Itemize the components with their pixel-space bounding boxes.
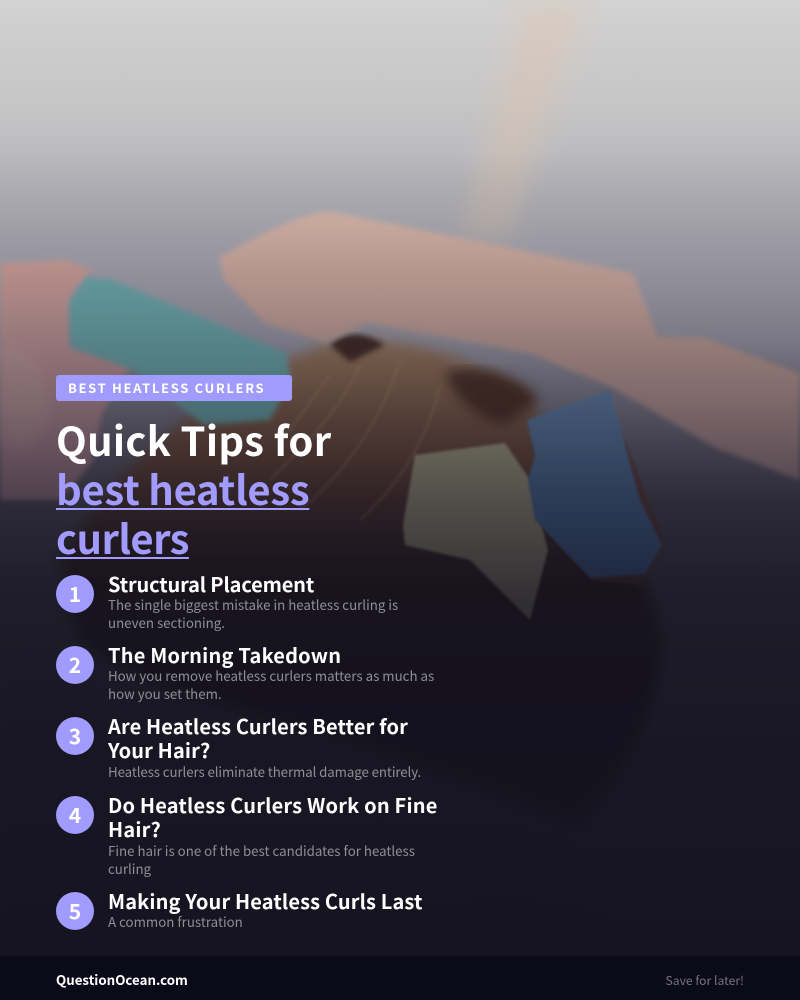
tip 4 text: Fine hair is one of the best candidates for heatless (108, 841, 415, 860)
number 5: 5 (69, 896, 81, 926)
tip 1 text: The single biggest mistake in heatless curling is (108, 595, 398, 614)
tip 5 (56, 886, 423, 931)
tip 2 (56, 640, 434, 703)
title (56, 410, 332, 566)
tip 2 text: How you remove heatless curlers matters as much as (108, 666, 434, 685)
category tag (56, 375, 292, 401)
number 1: 1 (69, 579, 81, 609)
number 5 (56, 892, 94, 930)
tip 5 text: A common frustration (108, 912, 243, 931)
tip 3 heading: Your Hair? (108, 735, 210, 764)
tip 1 text (108, 595, 398, 632)
tip 2 text: how you set them. (108, 684, 222, 703)
tip 3 heading: Are Heatless Curlers Better for (108, 711, 408, 740)
number 2: 2 (69, 650, 81, 680)
number 3: 3 (69, 721, 81, 751)
title: curlers (56, 508, 189, 566)
site name: QuestionOcean.com (56, 970, 188, 989)
tip 1 (56, 569, 398, 632)
tip 4 (56, 790, 438, 878)
category tag: BEST HEATLESS CURLERS (68, 378, 265, 397)
tip 4 text (108, 841, 415, 878)
number 2 (56, 646, 94, 684)
footer bar (0, 956, 800, 1000)
tip 3 heading (108, 711, 408, 764)
tip 5 heading: Making Your Heatless Curls Last (108, 886, 423, 915)
number 4: 4 (69, 800, 81, 830)
tip 2 heading: The Morning Takedown (108, 640, 341, 669)
title: best heatless (56, 459, 309, 517)
tip 1 text: uneven sectioning. (108, 613, 225, 632)
tip 4 heading (108, 790, 438, 843)
tip 2 text (108, 666, 434, 703)
tip 3 text: Heatless curlers eliminate thermal damage entirely. (108, 762, 421, 781)
title: Quick Tips for (56, 410, 331, 468)
number 1 (56, 575, 94, 613)
tip 4 heading: Do Heatless Curlers Work on Fine (108, 790, 438, 819)
tip 4 text: curling (108, 859, 151, 878)
tip 3 (56, 711, 421, 781)
tip 4 heading: Hair? (108, 814, 161, 843)
tip 1 heading: Structural Placement (108, 569, 314, 598)
number 4 (56, 796, 94, 834)
save note: Save for later! (665, 971, 744, 989)
number 3 (56, 717, 94, 755)
